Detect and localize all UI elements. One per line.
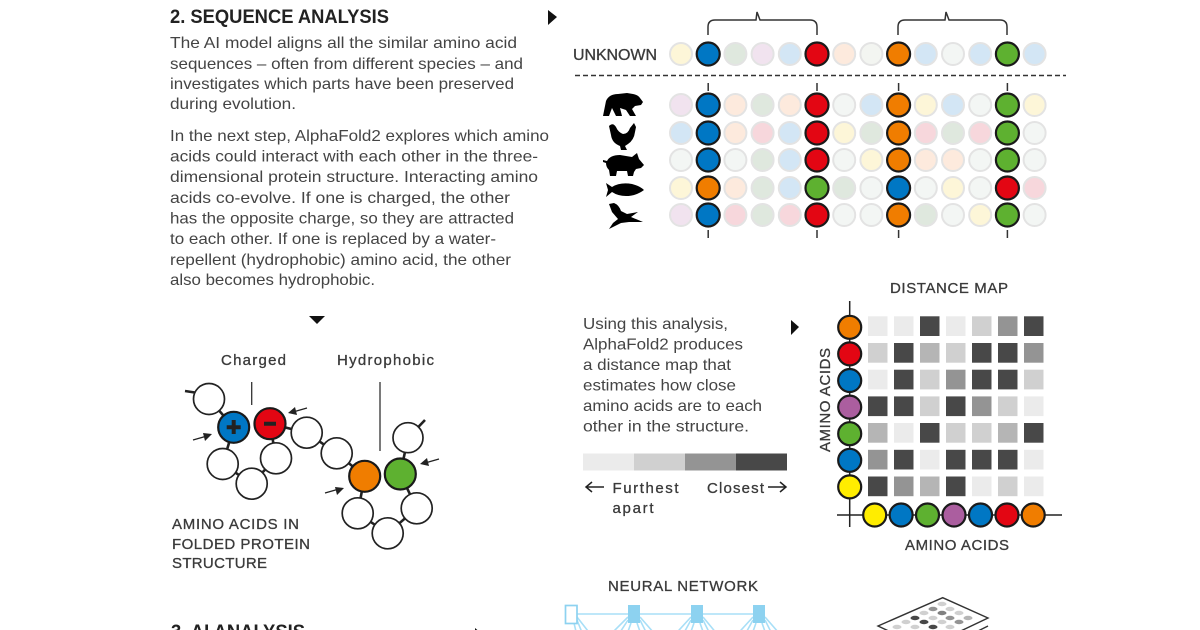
text block: distance map explanation: AlphaFold2 produces — [583, 336, 743, 354]
bracket: second interacting pair — [898, 12, 1007, 35]
caption: amino acids in folded protein structure: STRUCTURE — [172, 555, 267, 572]
diagram: neural network — [566, 605, 785, 630]
text block: co-evolution explanation: In the next step, AlphaFold2 explores which amino — [170, 128, 549, 145]
text block: co-evolution explanation: also becomes hydrophobic. — [170, 272, 375, 289]
heading: sequence analysis: 2. SEQUENCE ANALYSIS — [170, 7, 389, 28]
arrow: right to distance map — [791, 320, 799, 335]
text block: co-evolution explanation: has the opposite charge, so they are attracted — [170, 210, 514, 228]
legend label: furthest apart — [586, 480, 679, 517]
legend label: closest: Closest — [707, 480, 765, 497]
tick marks above and below aligned rows — [708, 83, 1007, 238]
title: distance map: DISTANCE MAP — [890, 280, 1008, 297]
text block: distance map explanation: Using this analysis, — [583, 316, 728, 333]
plus and minus signs — [227, 420, 276, 434]
row: bear sequence — [670, 94, 1046, 116]
diagram: stacked output layers — [878, 598, 988, 630]
charged amino acids — [218, 408, 286, 443]
text block: alignment intro: during evolution. — [170, 96, 296, 113]
distance map: grid — [868, 316, 1044, 496]
text block: co-evolution explanation: dimensional protein structure. Interacting amino — [170, 169, 538, 186]
legend label: furthest apart: apart — [612, 500, 654, 517]
small arrows pointing at interacting amino acids — [193, 407, 439, 495]
axis label: horizontal amino acids: AMINO ACIDS — [905, 537, 1009, 554]
text block: distance map explanation — [583, 316, 762, 436]
row: pig sequence — [670, 148, 1046, 172]
bracket: first interacting pair — [708, 12, 817, 35]
text block: distance map explanation: amino acids are to each — [583, 398, 762, 415]
distance map axes — [837, 301, 1062, 527]
icon: bear — [603, 93, 643, 116]
label: hydrophobic: Hydrophobic — [337, 352, 434, 369]
text block: alignment intro — [170, 35, 523, 113]
icon: fish — [606, 183, 644, 197]
hydrophobic amino acids — [349, 458, 416, 492]
text block: distance map explanation: a distance map that — [583, 357, 732, 374]
text block: co-evolution explanation — [170, 128, 549, 289]
icon: chicken — [609, 123, 636, 150]
text block: co-evolution explanation: repellent (hydrophobic) amino acid, the other — [170, 252, 512, 269]
label: unknown sequence: UNKNOWN — [573, 47, 657, 64]
row: bird sequence — [670, 204, 1046, 226]
arrow: right to alignment — [548, 10, 557, 25]
label: charged: Charged — [221, 352, 286, 369]
distance map: vertical amino acids — [838, 316, 861, 498]
text block: distance map explanation: estimates how close — [583, 378, 736, 394]
distance map: horizontal amino acids — [863, 504, 1045, 526]
icon: bird — [609, 203, 643, 229]
text block: distance map explanation: other in the structure. — [583, 418, 749, 436]
arrow: down to folded protein — [309, 316, 325, 324]
row: chicken sequence — [670, 122, 1046, 144]
icon: pig — [603, 153, 644, 176]
row: fish sequence — [670, 176, 1046, 200]
title: neural network: NEURAL NETWORK — [608, 578, 758, 595]
diagram: folded protein — [185, 384, 432, 549]
row: unknown sequence — [670, 42, 1046, 66]
text block: co-evolution explanation: acids could interact with each other in the three- — [170, 148, 538, 166]
caption: amino acids in folded protein structure — [172, 516, 310, 572]
text block: alignment intro: investigates which parts have been preserved — [170, 76, 514, 93]
text block: alignment intro: The AI model aligns all the similar amino acid — [170, 35, 517, 52]
caption: amino acids in folded protein structure: AMINO ACIDS IN — [172, 516, 299, 533]
arrow: right to neural network — [475, 628, 481, 630]
caption: amino acids in folded protein structure: FOLDED PROTEIN — [172, 536, 310, 553]
text block: co-evolution explanation: acids co-evolve. If one is charged, the other — [170, 190, 511, 207]
axis label: vertical amino acids: AMINO ACIDS — [817, 348, 834, 452]
unfilled amino acids — [194, 384, 432, 549]
legend label: furthest apart: Furthest — [612, 480, 679, 497]
text block: co-evolution explanation: to each other. If one is replaced by a water- — [170, 231, 496, 248]
legend: distance scale — [583, 454, 787, 517]
text block: alignment intro: sequences – often from different species – and — [170, 56, 523, 73]
